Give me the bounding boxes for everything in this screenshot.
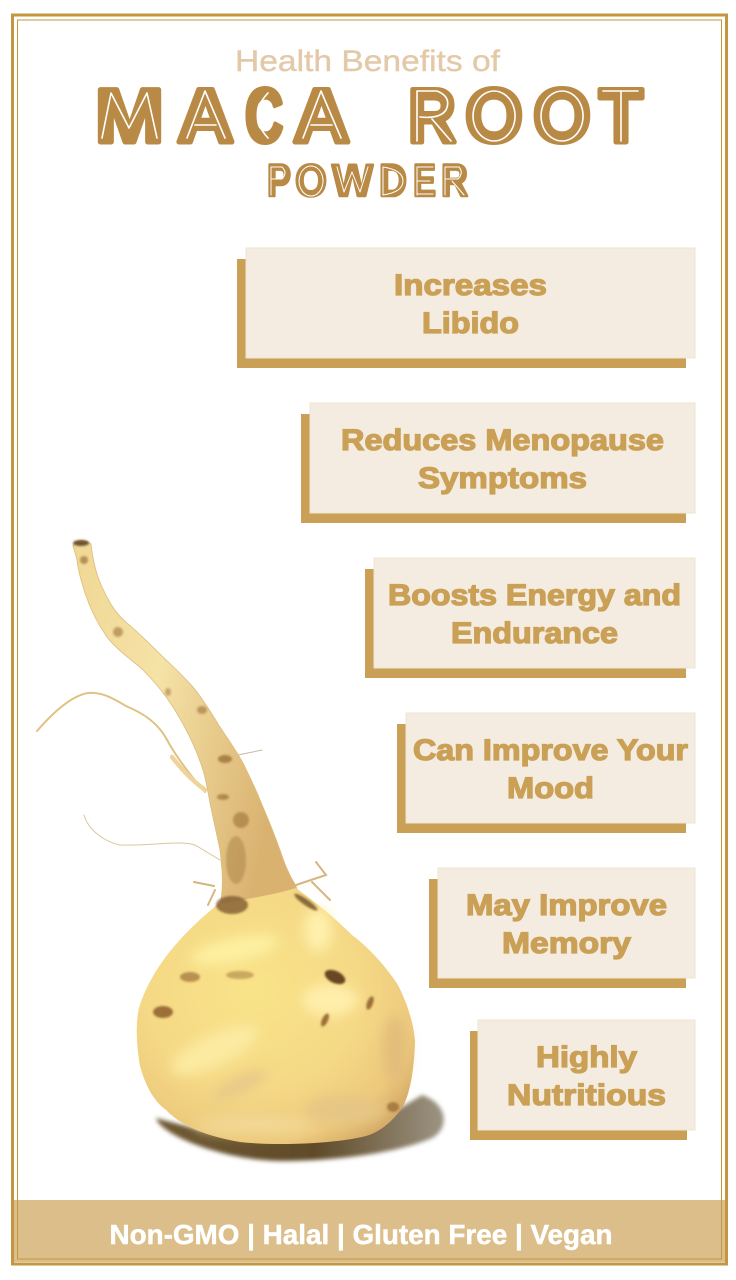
benefit card: increases libido	[237, 248, 695, 368]
title: powder: P	[267, 155, 291, 206]
benefit card: can improve your mood: Mood	[507, 772, 594, 805]
title: maca root: A	[293, 74, 350, 159]
title: powder	[267, 155, 468, 206]
benefit card: may improve memory: Memory	[502, 927, 631, 960]
benefit card: boosts energy and endurance: Endurance	[451, 617, 618, 650]
title: powder: W	[332, 155, 373, 206]
benefit card: reduces menopause symptoms: Symptoms	[418, 462, 587, 495]
maca root illustration	[37, 540, 444, 1161]
title: maca root: O	[465, 74, 523, 159]
title: powder: E	[413, 155, 436, 206]
title: maca root: O	[533, 74, 591, 159]
heading: health benefits of: Health Benefits of	[235, 45, 501, 78]
root bulb	[137, 888, 415, 1144]
root stem	[73, 540, 300, 915]
benefit card: highly nutritious: Nutritious	[507, 1079, 666, 1112]
title: maca root	[95, 74, 643, 159]
side rootlets	[37, 693, 330, 905]
benefit card: can improve your mood	[397, 713, 695, 833]
benefit card: increases libido: Libido	[422, 307, 519, 340]
footer band	[14, 1200, 725, 1262]
benefit card: highly nutritious	[470, 1020, 695, 1140]
title: powder: R	[441, 155, 468, 206]
benefit card: may improve memory: May Improve	[466, 889, 667, 922]
title: maca root: A	[177, 74, 234, 159]
benefit card: boosts energy and endurance: Boosts Energy and	[388, 579, 681, 612]
title: maca root: C	[245, 74, 283, 159]
benefit card: increases libido: Increases	[394, 269, 547, 302]
bulb highlights	[165, 908, 407, 1134]
surface blemishes	[73, 540, 399, 1112]
title: maca root: T	[599, 74, 643, 159]
benefit card: can improve your mood: Can Improve Your	[413, 734, 688, 767]
title: powder: D	[379, 155, 407, 206]
benefit card: boosts energy and endurance	[365, 558, 695, 678]
benefit card: reduces menopause symptoms	[301, 403, 695, 523]
footer text: Non-GMO | Halal | Gluten Free | Vegan	[110, 1219, 612, 1250]
title: powder: O	[295, 155, 327, 206]
benefit card: highly nutritious: Highly	[536, 1041, 637, 1074]
ground shadow	[156, 1095, 444, 1161]
title: maca root: R	[408, 74, 456, 159]
benefit card: reduces menopause symptoms: Reduces Menopause	[341, 424, 664, 457]
benefit card: may improve memory	[429, 868, 695, 988]
title: maca root: M	[95, 74, 164, 159]
